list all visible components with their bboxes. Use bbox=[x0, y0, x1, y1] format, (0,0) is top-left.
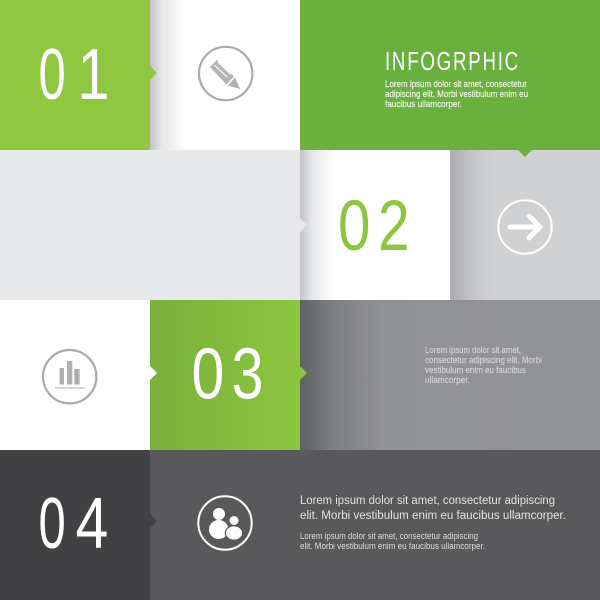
heading: INFOGRPHIC bbox=[385, 46, 518, 76]
number 01: 1 bbox=[78, 34, 110, 114]
number 03 bbox=[192, 333, 264, 414]
number 04: 4 bbox=[76, 482, 108, 563]
number 01 bbox=[38, 34, 110, 115]
pointer: green down bbox=[518, 150, 532, 157]
text block: small bbox=[300, 531, 485, 551]
pointer: lime bbox=[300, 366, 307, 380]
number 03: 3 bbox=[232, 333, 264, 414]
text block bbox=[425, 345, 542, 385]
icon: bar chart bbox=[43, 350, 96, 403]
text block: faucibus ullamcorper. bbox=[385, 99, 462, 109]
panel: 02 white number bbox=[300, 150, 450, 300]
text block: vestibulum enim eu faucibus bbox=[425, 365, 526, 375]
pointer: light grey bbox=[300, 218, 307, 232]
icon: people bbox=[198, 496, 252, 550]
icon: pencil bbox=[199, 47, 252, 100]
number 02: 0 bbox=[338, 185, 370, 265]
panel: pencil icon tile bbox=[150, 0, 300, 150]
text block bbox=[385, 79, 528, 109]
panel: 03 green number bbox=[150, 300, 300, 450]
text block: small: elit. Morbi vestibulum enim eu faucibus ullamcorper. bbox=[300, 541, 485, 551]
panel: 01 green number bbox=[0, 0, 150, 150]
text block: large: elit. Morbi vestibulum enim eu faucibus ullamcorper. bbox=[300, 510, 566, 522]
panel: grey text bbox=[300, 300, 600, 450]
text block: large bbox=[300, 495, 566, 522]
panel: light grey band bbox=[0, 150, 300, 300]
text block: consectetur adipiscing elit. Morbi bbox=[425, 355, 542, 365]
pointer: dark bbox=[150, 514, 157, 528]
panel: 04 dark number bbox=[0, 450, 150, 600]
panel: people icon and text bbox=[150, 450, 600, 600]
number 02: 2 bbox=[378, 186, 410, 265]
text block: large: Lorem ipsum dolor sit amet, consectetur adipiscing bbox=[300, 495, 555, 507]
panel: bar chart icon tile bbox=[0, 300, 150, 450]
icon: right arrow bbox=[498, 200, 552, 254]
number 04 bbox=[38, 482, 108, 564]
pointer: 01 bbox=[150, 66, 157, 80]
panel: infographic title bbox=[300, 0, 600, 150]
pointer: white bbox=[150, 366, 157, 380]
text block: small: Lorem ipsum dolor sit amet, consectetur adipiscing bbox=[300, 531, 478, 541]
text block: ullamcorper. bbox=[425, 375, 470, 385]
text block: Lorem ipsum dolor sit amet, bbox=[425, 345, 521, 355]
text block: Lorem ipsum dolor sit amet, consectetur bbox=[385, 79, 527, 89]
number 04: 0 bbox=[38, 484, 66, 564]
number 02 bbox=[338, 185, 410, 265]
number 01: 0 bbox=[38, 35, 66, 115]
number 03: 0 bbox=[192, 333, 224, 414]
text block: adipiscing elit. Morbi vestibulum enim eu bbox=[385, 89, 528, 99]
panel: arrow icon tile bbox=[450, 150, 600, 300]
